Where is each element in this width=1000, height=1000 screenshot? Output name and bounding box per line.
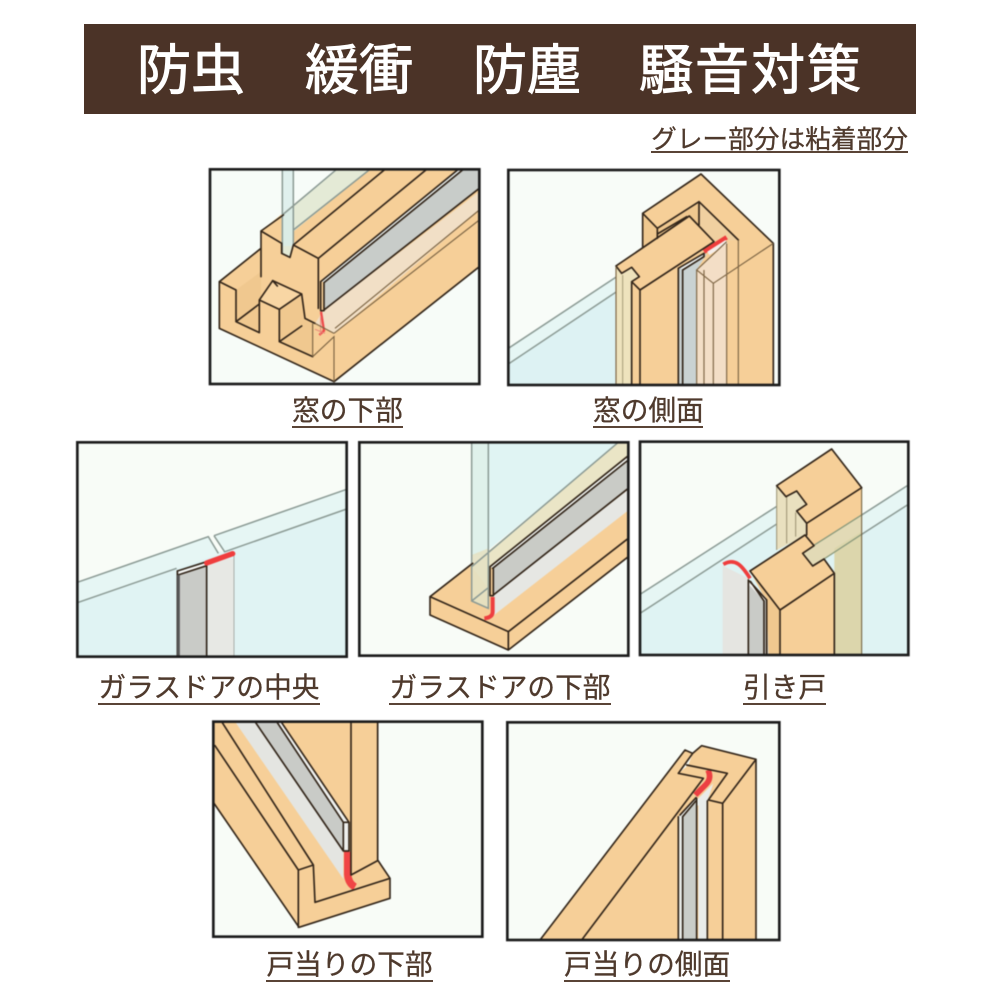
panel border [210, 169, 479, 384]
rear frame [582, 746, 756, 940]
red marker [319, 312, 324, 335]
wood frame [632, 174, 773, 385]
gray seal strip [678, 798, 697, 940]
door block top [616, 218, 694, 272]
glass pane [640, 485, 908, 655]
panel border [508, 170, 779, 385]
panel: door stop bottom [213, 722, 482, 937]
label: ガラスドアの中央: ガラスドアの中央 [99, 672, 319, 703]
front wood block [750, 535, 834, 655]
panel: door stop side [507, 722, 779, 940]
red marker [207, 554, 233, 563]
rear frame [777, 486, 862, 655]
label: 窓の側面: 窓の側面 [593, 395, 704, 426]
panel border [640, 442, 908, 655]
glass pane [282, 169, 370, 257]
glass background [488, 442, 620, 550]
red marker [704, 237, 727, 252]
wood board [430, 511, 628, 649]
glass edge tint [488, 443, 628, 566]
gray seal strip [324, 169, 479, 310]
door stop recess [678, 765, 727, 800]
title: 騒音対策: 騒音対策 [639, 41, 863, 101]
outlines [540, 746, 756, 940]
pale adhesive strip [315, 192, 479, 333]
red marker [484, 597, 493, 618]
glass pane [509, 276, 616, 384]
panel: glass door center [77, 442, 347, 657]
frame outlines [616, 174, 773, 385]
gray seal strip [678, 253, 707, 385]
title: 防塵: 防塵 [473, 41, 581, 101]
panel: window side [508, 170, 779, 385]
wood frame [219, 169, 479, 382]
label: 引き戸: 引き戸 [743, 672, 826, 703]
pale adhesive strip [208, 559, 234, 657]
label: 戸当りの下部: 戸当りの下部 [266, 949, 433, 980]
gray seal strip [177, 562, 207, 657]
outlines [748, 449, 862, 655]
vertical glass [472, 442, 618, 608]
gray seal strip [493, 460, 628, 595]
label: ガラスドアの下部: ガラスドアの下部 [390, 672, 610, 703]
panel border [213, 722, 482, 937]
note: gray part is adhesive: グレー部分は粘着部分 [651, 126, 908, 154]
pale adhesive strip [493, 489, 628, 616]
title: 緩衝: 緩衝 [305, 41, 413, 101]
gray seal strip [748, 580, 768, 655]
wood frame [213, 722, 390, 927]
title: 防虫: 防虫 [137, 41, 245, 101]
outlines [213, 722, 390, 927]
panel: glass door bottom [359, 442, 628, 656]
top wood block [777, 449, 862, 523]
pale adhesive strip [723, 566, 748, 655]
red marker [723, 562, 750, 578]
panel border [507, 722, 779, 940]
gray seal strip [255, 722, 343, 851]
panel border [77, 442, 347, 657]
label: 窓の下部: 窓の下部 [292, 395, 403, 426]
title banner [84, 24, 916, 114]
frame outlines [219, 169, 479, 382]
label: 戸当りの側面: 戸当りの側面 [564, 949, 730, 980]
glass edge in frame [616, 266, 639, 385]
diagrams [75, 167, 910, 942]
door panel [540, 750, 703, 940]
panel: sliding door [640, 442, 908, 655]
pale adhesive strip [235, 722, 343, 879]
outlines [430, 456, 628, 650]
panel: window bottom [210, 169, 479, 384]
pale adhesive strip [698, 783, 713, 940]
panel border [359, 442, 628, 656]
pale adhesive strip [697, 242, 727, 385]
red marker [695, 770, 710, 795]
glass pane [77, 489, 347, 657]
red marker [348, 852, 355, 887]
